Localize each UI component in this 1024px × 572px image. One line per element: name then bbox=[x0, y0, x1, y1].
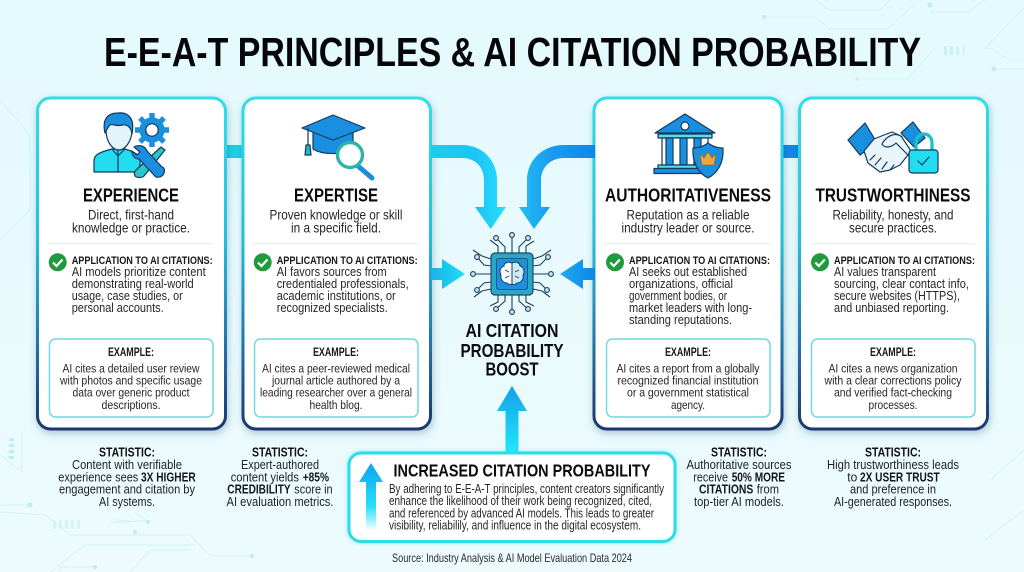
example box: EXAMPLE: bbox=[665, 345, 711, 359]
definition: Proven knowledge or skill bbox=[270, 206, 402, 222]
connector: authoritativeness to trustworthiness bbox=[781, 145, 801, 158]
application text: demonstrating real-world bbox=[72, 276, 194, 291]
definition bbox=[72, 206, 190, 236]
application text: usage, case studies, or bbox=[72, 288, 183, 303]
application text: market leaders with long- bbox=[629, 300, 752, 315]
definition: Reliability, honesty, and bbox=[832, 206, 954, 222]
panel: experience bbox=[38, 98, 226, 429]
icon: check bbox=[49, 253, 67, 271]
example box: with photos and specific usage bbox=[59, 374, 202, 388]
statistic: trustworthiness: High trustworthiness leads bbox=[827, 457, 959, 472]
statistic: expertise: content yields bbox=[231, 469, 299, 484]
statistic: authoritativeness: top-tier AI models. bbox=[694, 494, 784, 509]
panel: increased citation probability bbox=[349, 453, 675, 542]
application text: AI favors sources from bbox=[277, 264, 387, 279]
example box: AI cites a report from a globally bbox=[616, 362, 760, 376]
application text: government bodies, or bbox=[629, 288, 728, 303]
statistic: authoritativeness: 50% MORE bbox=[732, 469, 785, 484]
application text: recognized specialists. bbox=[277, 300, 388, 315]
statistic: expertise: +85% bbox=[303, 469, 329, 484]
definition bbox=[622, 206, 754, 236]
application text: personal accounts. bbox=[72, 300, 164, 315]
statistic: authoritativeness: from bbox=[757, 482, 779, 496]
example box: EXAMPLE: bbox=[313, 345, 359, 359]
panel heading: INCREASED CITATION PROBABILITY bbox=[394, 461, 651, 481]
definition bbox=[270, 206, 402, 236]
definition bbox=[832, 206, 954, 236]
statistic: trustworthiness: to bbox=[847, 469, 857, 484]
panel: trustworthiness bbox=[800, 98, 988, 429]
icon: graduation cap with magnifier bbox=[302, 115, 372, 178]
statistic: authoritativeness: receive bbox=[693, 469, 728, 484]
example box bbox=[50, 339, 213, 417]
definition: Reputation as a reliable bbox=[626, 206, 750, 222]
example box bbox=[254, 339, 418, 417]
arrow: up to hub bbox=[497, 386, 527, 453]
application text: credentialed professionals, bbox=[277, 276, 409, 291]
application text bbox=[629, 255, 770, 327]
heading: authoritativeness: AUTHORITATIVENESS bbox=[605, 184, 771, 206]
example box: recognized financial institution bbox=[618, 374, 759, 388]
statistic: experience: Content with verifiable bbox=[72, 457, 182, 472]
example box: agency. bbox=[671, 398, 705, 412]
icon: check bbox=[811, 253, 829, 271]
panel body bbox=[389, 481, 664, 532]
example box: EXAMPLE: bbox=[108, 345, 154, 359]
example box: AI cites a peer-reviewed medical bbox=[262, 362, 410, 376]
statistic: experience: 3X HIGHER bbox=[141, 469, 196, 484]
application text: APPLICATION TO AI CITATIONS: bbox=[277, 255, 418, 267]
example box bbox=[606, 339, 770, 417]
statistic: expertise: CREDIBILITY bbox=[227, 482, 291, 496]
definition: Direct, first-hand bbox=[88, 206, 174, 222]
example box: leading researcher over a general bbox=[260, 386, 412, 400]
example box: data over generic product bbox=[72, 386, 190, 400]
application text: APPLICATION TO AI CITATIONS: bbox=[629, 255, 770, 267]
statistic: trustworthiness: AI-generated responses. bbox=[834, 494, 952, 509]
icon: institution with shield bbox=[654, 114, 723, 178]
statistic: expertise bbox=[226, 445, 334, 509]
application text: secure websites (HTTPS), bbox=[834, 288, 960, 303]
application text: APPLICATION TO AI CITATIONS: bbox=[72, 255, 213, 267]
example box: processes. bbox=[868, 398, 918, 412]
arrow: authoritativeness curved to hub bbox=[519, 145, 595, 229]
heading: trustworthiness: TRUSTWORTHINESS bbox=[816, 184, 970, 206]
statistic: authoritativeness: STATISTIC: bbox=[711, 445, 767, 460]
statistic: trustworthiness bbox=[827, 445, 959, 509]
definition: secure practices. bbox=[849, 220, 937, 236]
icon: small up arrow bbox=[359, 463, 383, 530]
statistic: experience: AI systems. bbox=[99, 494, 155, 509]
application text: sourcing, clear contact info, bbox=[834, 276, 969, 291]
statistic: authoritativeness: Authoritative sources bbox=[686, 457, 792, 472]
definition: in a specific field. bbox=[291, 220, 381, 236]
panel body: visibility, reliabilily, and influence in the digital ecosystem. bbox=[389, 518, 641, 532]
application text: standing reputations. bbox=[629, 312, 732, 327]
hub label: AI CITATION bbox=[466, 320, 558, 341]
statistic: trustworthiness: 2X USER TRUST bbox=[860, 469, 940, 484]
application text: and unbiased reporting. bbox=[834, 300, 949, 315]
icon: person with gear and tools bbox=[94, 113, 169, 178]
heading: experience: EXPERIENCE bbox=[83, 184, 179, 206]
application text: AI seeks out established bbox=[629, 264, 747, 279]
statistic: expertise: score in bbox=[294, 482, 333, 496]
example box: EXAMPLE: bbox=[870, 345, 916, 359]
statistic: expertise: AI evaluation metrics. bbox=[226, 494, 334, 509]
statistic: experience: engagement and citation by bbox=[59, 482, 195, 496]
example box: AI cites a detailed user review bbox=[62, 362, 200, 376]
panel body: By adhering to E-E-A-T principles, content creators significantly bbox=[389, 481, 664, 496]
application text: AI models prioritize content bbox=[72, 264, 206, 279]
statistic: authoritativeness: CITATIONS bbox=[699, 482, 754, 496]
example box: or a government statistical bbox=[627, 386, 749, 400]
arrow: expertise straight to hub bbox=[431, 259, 465, 289]
statistic: authoritativeness bbox=[686, 445, 792, 509]
hub label: BOOST bbox=[486, 358, 539, 380]
arrow: authoritativeness straight to hub bbox=[560, 259, 595, 289]
application text bbox=[277, 255, 418, 315]
hub label: PROBABILITY bbox=[460, 340, 564, 361]
application text: AI values transparent bbox=[834, 264, 936, 279]
statistic: experience: experience sees bbox=[58, 469, 139, 484]
application text bbox=[72, 255, 213, 315]
heading: expertise: EXPERTISE bbox=[294, 184, 378, 206]
arrow: expertise curved to hub bbox=[431, 145, 506, 229]
panel: expertise bbox=[243, 98, 430, 429]
hub label bbox=[460, 320, 564, 380]
statistic: expertise: STATISTIC: bbox=[252, 445, 308, 460]
icon: handshake with padlock bbox=[848, 122, 938, 173]
application text: organizations, official bbox=[629, 276, 733, 291]
definition: industry leader or source. bbox=[622, 220, 754, 236]
panel: authoritativeness bbox=[594, 98, 782, 429]
icon: check bbox=[254, 253, 272, 271]
example box: and verified fact-checking bbox=[834, 386, 952, 400]
icon: AI chip with brain bbox=[471, 233, 553, 314]
statistic: experience bbox=[58, 445, 196, 509]
example box: journal article authored by a bbox=[271, 374, 400, 388]
example box bbox=[812, 339, 975, 417]
statistic: expertise: Expert-authored bbox=[241, 457, 319, 472]
example box: AI cites a news organization bbox=[828, 362, 958, 376]
application text: APPLICATION TO AI CITATIONS: bbox=[834, 255, 975, 267]
application text: academic institutions, or bbox=[277, 288, 396, 303]
example box: health blog. bbox=[310, 398, 362, 412]
statistic: experience: STATISTIC: bbox=[99, 445, 155, 460]
source note: Source: Industry Analysis & AI Model Evaluation Data 2024 bbox=[392, 551, 632, 565]
application text bbox=[834, 255, 975, 315]
panel body: enhance the likelihood of their work being recognized, cited, bbox=[389, 493, 652, 508]
statistic: trustworthiness: STATISTIC: bbox=[865, 445, 921, 460]
statistic: trustworthiness: and preference in bbox=[850, 482, 936, 496]
icon: check bbox=[606, 253, 624, 271]
definition: knowledge or practice. bbox=[72, 220, 190, 236]
example box: with a clear corrections policy bbox=[824, 374, 962, 388]
connector: experience to expertise bbox=[224, 145, 244, 158]
example box: descriptions. bbox=[102, 398, 160, 412]
panel body: and referenced by advanced AI models. This leads to greater bbox=[389, 506, 654, 520]
